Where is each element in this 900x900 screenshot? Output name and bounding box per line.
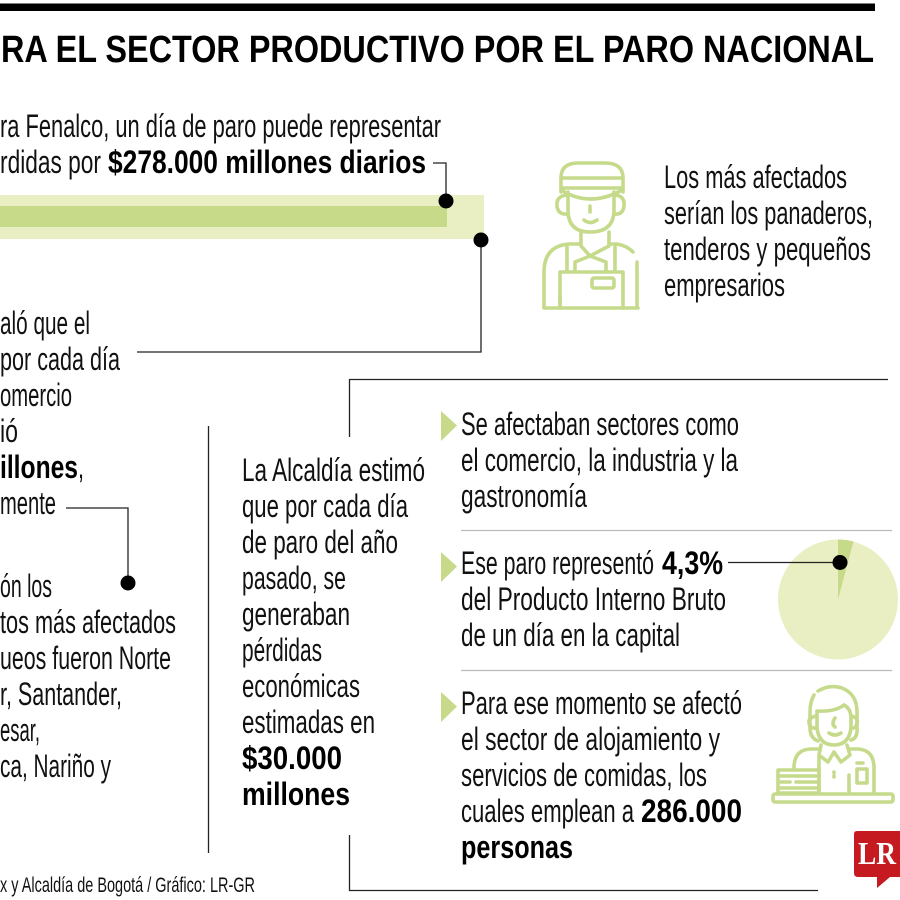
text block: affected regions: esar, xyxy=(0,712,40,748)
vertical divider xyxy=(208,426,210,853)
bullet: sectors xyxy=(441,411,457,441)
source note: x y Alcaldía de Bogotá / Gráfico: LR-GR xyxy=(0,874,255,897)
logo: LR xyxy=(854,831,900,888)
text block: commerce losses: illones xyxy=(0,449,78,485)
text block: sectors xyxy=(461,406,739,514)
icon: receptionist xyxy=(773,687,893,802)
connector: commerce to regions xyxy=(66,508,136,590)
text block: Alcaldía estimate: La Alcaldía estimó xyxy=(242,452,425,488)
top rule xyxy=(0,4,875,11)
text block: Alcaldía estimate: pasado, se xyxy=(242,560,346,596)
text block: lodging and food: el sector de alojamiento y xyxy=(461,721,720,757)
text block: affected regions: r, Santander, xyxy=(0,676,122,712)
text block: Alcaldía estimate: económicas xyxy=(242,668,360,704)
text block: commerce losses: por cada día xyxy=(0,341,120,377)
text block: sectors: Se afectaban sectores como xyxy=(461,406,739,442)
text block: most affected: empresarios xyxy=(664,267,785,303)
bullet: GDP share xyxy=(441,552,457,582)
connector: bar end to left text xyxy=(137,232,488,352)
text block: lodging and food: personas xyxy=(461,829,573,865)
text block: Fenalco xyxy=(0,108,441,180)
text block: Alcaldía estimate: $30.000 xyxy=(242,740,342,776)
pie chart: 4.3% of GDP xyxy=(778,539,898,660)
text block: commerce losses: aló que el xyxy=(0,305,90,341)
text block: commerce losses: omercio xyxy=(0,377,72,413)
text block: Alcaldía estimate: pérdidas xyxy=(242,632,322,668)
text block: Fenalco: ra Fenalco, un día de paro puede representar xyxy=(0,108,441,144)
text block: Alcaldía estimate: estimadas en xyxy=(242,704,375,740)
text block: affected regions: ca, Nariño y xyxy=(0,748,111,784)
text block: sectors: gastronomía xyxy=(461,478,587,514)
text block: Fenalco: $278.000 millones diarios xyxy=(108,144,426,180)
text block: GDP share: 4,3% xyxy=(662,545,723,581)
connector: GDP to pie xyxy=(728,555,848,570)
text block: lodging and food xyxy=(461,685,742,865)
bullet: lodging xyxy=(441,692,457,722)
text block: lodging and food: servicios de comidas, los xyxy=(461,757,707,793)
divider xyxy=(461,530,892,670)
text block: lodging and food: Para ese momento se afectó xyxy=(461,685,742,721)
icon: baker xyxy=(544,163,638,308)
text block: commerce losses: ió xyxy=(0,413,18,449)
text block: commerce losses: , xyxy=(78,449,84,485)
text block: GDP share: Ese paro representó xyxy=(461,545,654,581)
text block: commerce losses: mente xyxy=(0,485,56,521)
text block: most affected xyxy=(664,159,873,303)
text block: Alcaldía estimate: millones xyxy=(242,776,350,812)
text block: commerce losses xyxy=(0,305,120,521)
connector: Fenalco to bar xyxy=(433,163,454,208)
bar chart: losses comparison xyxy=(0,195,484,239)
text block: Fenalco: rdidas por xyxy=(0,144,101,180)
text block: lodging and food: cuales emplean a xyxy=(461,793,634,829)
text block: affected regions: ón los xyxy=(0,568,52,604)
text block: affected regions xyxy=(0,568,176,784)
text block: Alcaldía estimate: de paro del año xyxy=(242,524,398,560)
text block: lodging and food: 286.000 xyxy=(641,793,742,829)
text block: Alcaldía estimate: que por cada día xyxy=(242,488,408,524)
text block: GDP share: del Producto Interno Bruto xyxy=(461,581,726,617)
text block: affected regions: ueos fueron Norte xyxy=(0,640,171,676)
text block: Alcaldía estimate: generaban xyxy=(242,596,350,632)
frame: right panel xyxy=(350,380,888,890)
text block: affected regions: tos más afectados xyxy=(0,604,176,640)
text block: sectors: el comercio, la industria y la xyxy=(461,442,738,478)
text block: GDP share xyxy=(461,545,726,653)
text block: Alcaldía estimate xyxy=(242,452,425,812)
text block: GDP share: de un día en la capital xyxy=(461,617,680,653)
